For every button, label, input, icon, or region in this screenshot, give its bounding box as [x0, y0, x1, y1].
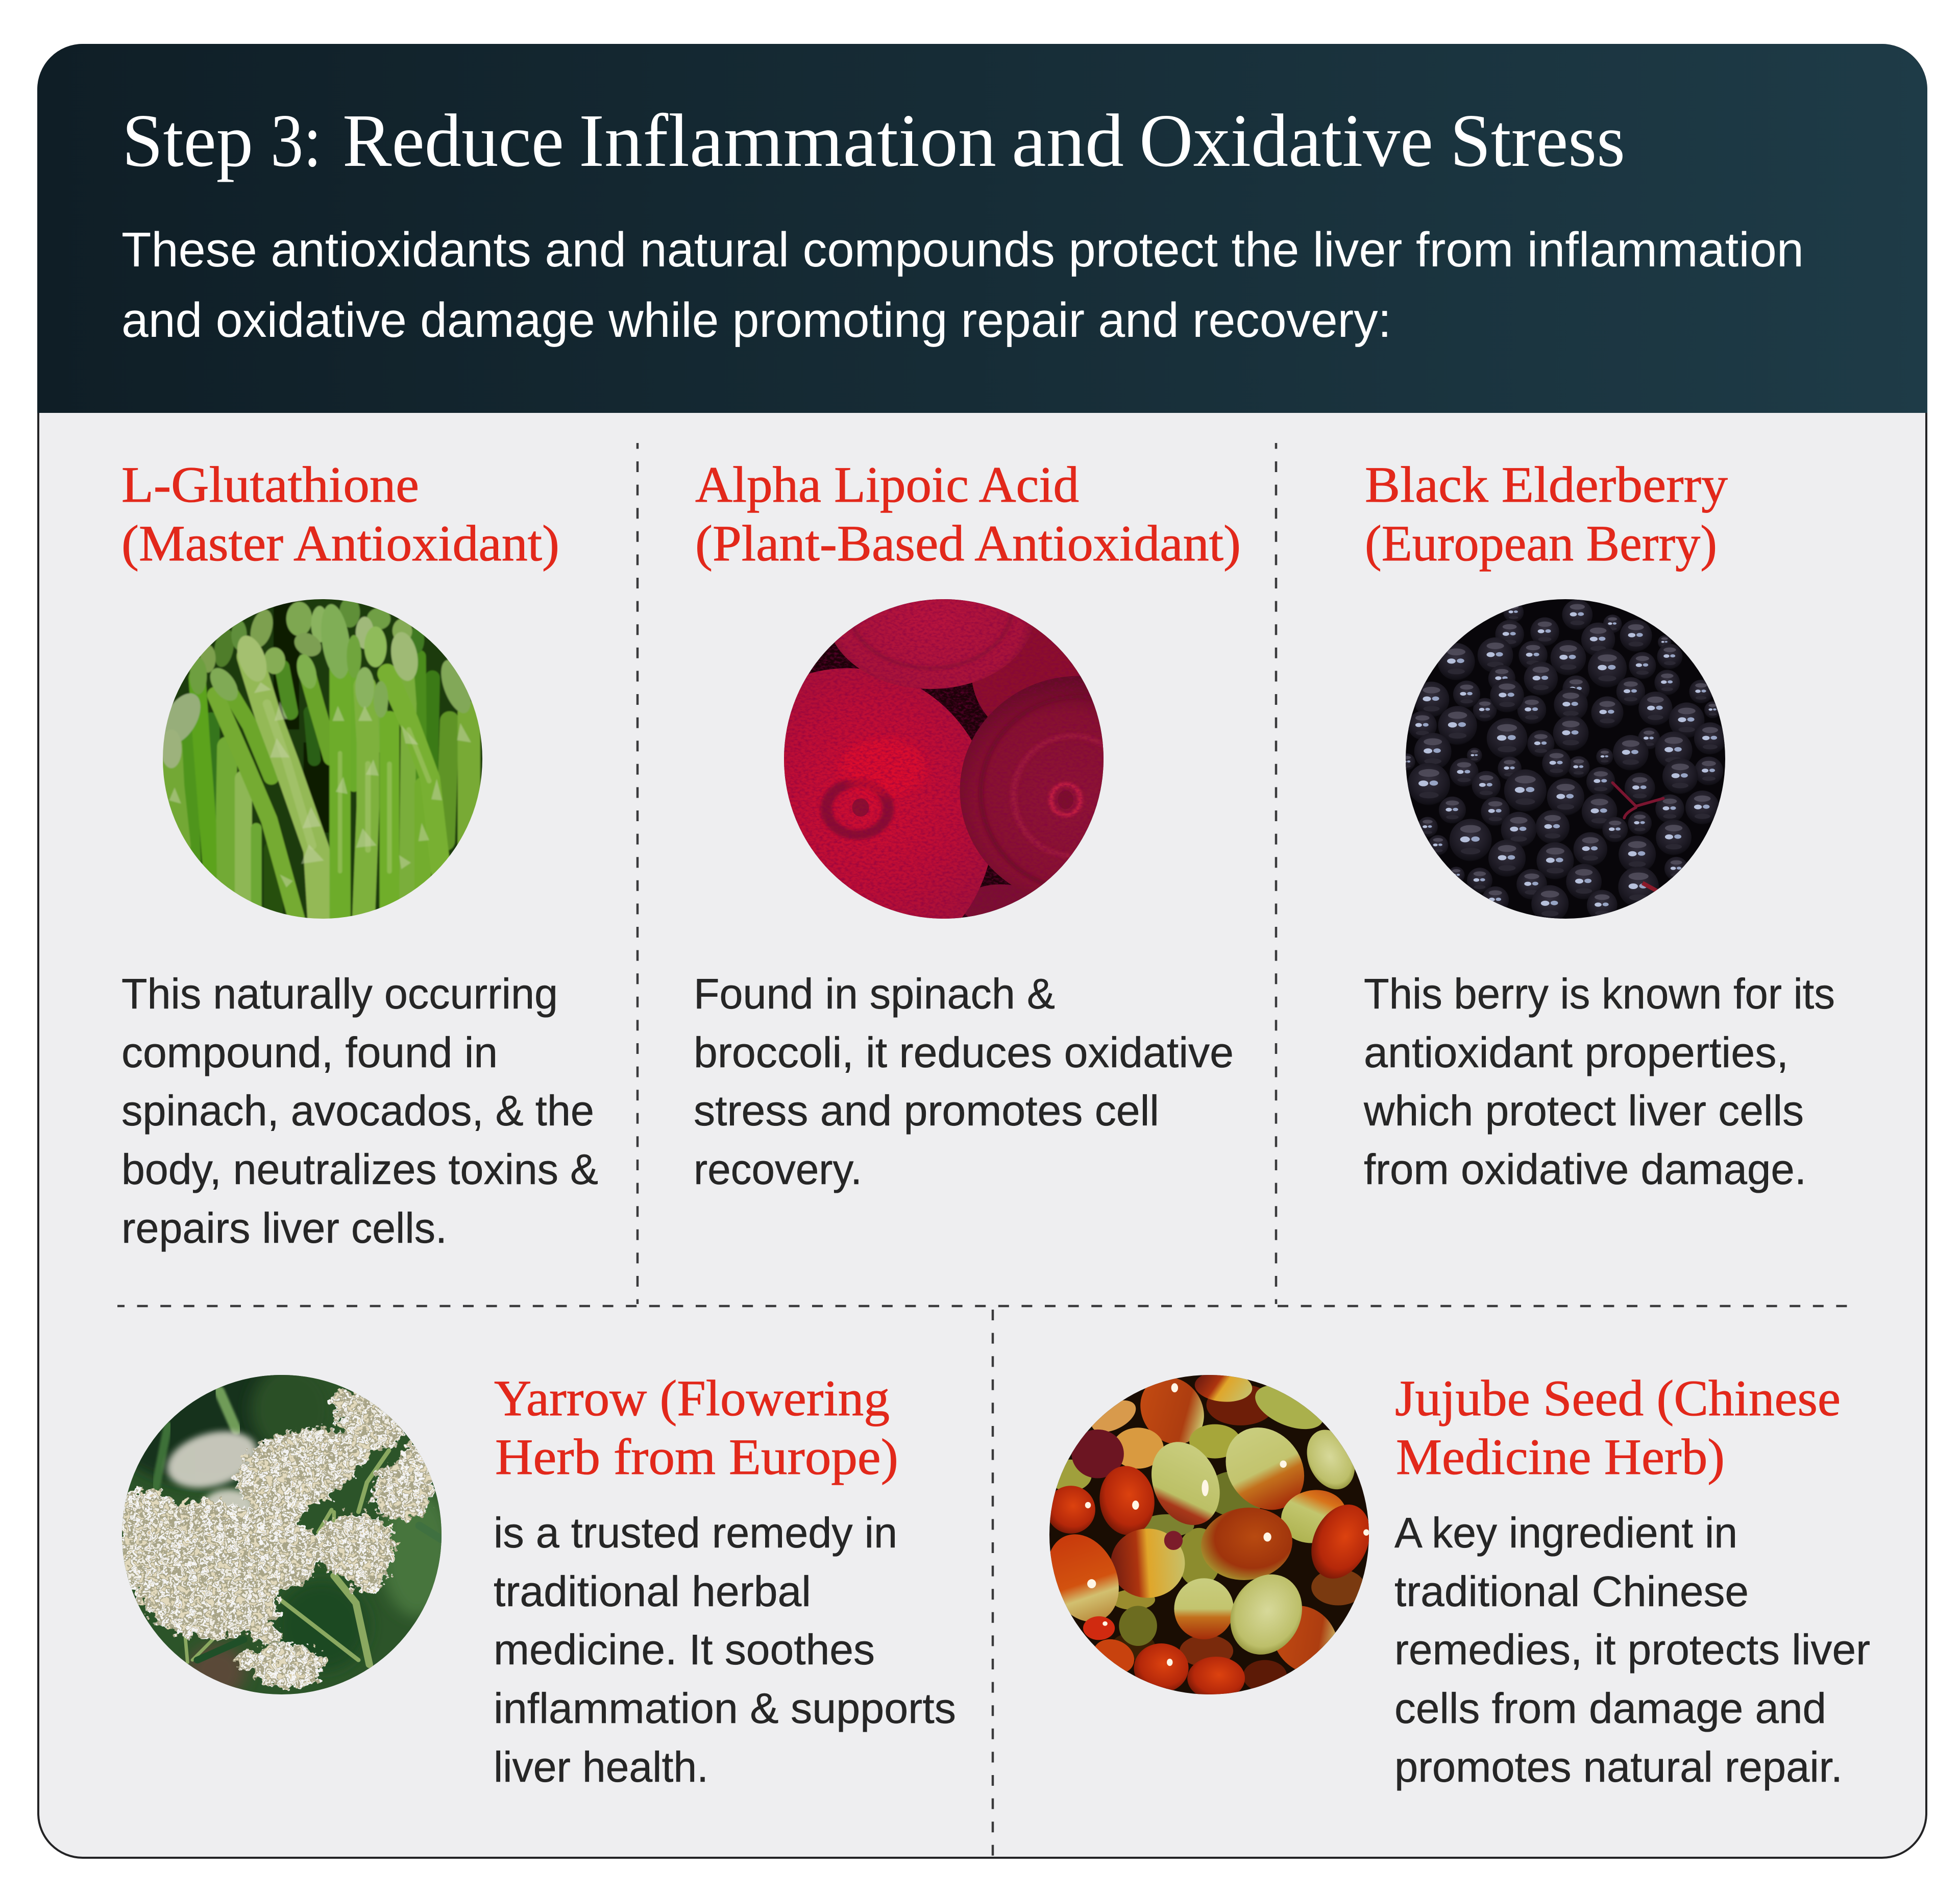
image: beet slices — [784, 599, 1104, 919]
panel: Black Elderberry — [1363, 456, 1835, 1193]
title — [122, 99, 1625, 183]
header band — [37, 44, 1927, 413]
body text: Alpha Lipoic Acid: recovery. — [694, 1145, 862, 1193]
body text: Yarrow: traditional herbal — [494, 1567, 811, 1615]
body text: L-Glutathione — [121, 970, 598, 1252]
subtitle: These antioxidants and natural compounds protect the liver from inflammation — [121, 223, 1804, 277]
body text: Yarrow: inflammation & supports — [494, 1684, 956, 1732]
heading: L-Glutathione — [121, 456, 559, 572]
panel: Alpha Lipoic Acid — [694, 456, 1241, 1193]
body text: Yarrow: liver health. — [494, 1743, 708, 1791]
heading: Alpha Lipoic Acid: Alpha Lipoic Acid — [695, 456, 1079, 513]
body text: Black Elderberry: which protect liver cells — [1363, 1087, 1804, 1135]
body text: Black Elderberry — [1363, 970, 1835, 1193]
image: jujube fruits — [1035, 1367, 1380, 1700]
title: Stress — [1450, 99, 1625, 183]
body text: L-Glutathione: repairs liver cells. — [121, 1204, 447, 1252]
subtitle: and oxidative damage while promoting repair and recovery: — [121, 293, 1391, 348]
heading: Yarrow — [494, 1370, 898, 1485]
heading: L-Glutathione: L-Glutathione — [121, 456, 419, 513]
body text: Alpha Lipoic Acid: broccoli, it reduces oxidative — [694, 1028, 1234, 1076]
heading: Jujube Seed: Jujube Seed (Chinese — [1395, 1370, 1841, 1426]
image: asparagus — [163, 599, 482, 919]
panel: L-Glutathione — [121, 456, 598, 1252]
body text: Yarrow — [494, 1509, 956, 1791]
image: elderberries — [1399, 595, 1730, 923]
body text: L-Glutathione: body, neutralizes toxins & — [121, 1145, 598, 1193]
image: yarrow flowers — [122, 1375, 442, 1694]
body text: Black Elderberry: from oxidative damage. — [1364, 1145, 1806, 1193]
heading: Black Elderberry: Black Elderberry — [1365, 456, 1728, 513]
body text: Alpha Lipoic Acid — [694, 970, 1234, 1193]
title: Inflammation — [579, 99, 996, 183]
body text: Jujube Seed: promotes natural repair. — [1394, 1743, 1843, 1791]
body text: Alpha Lipoic Acid: stress and promotes cell — [694, 1087, 1159, 1135]
body text: Black Elderberry: antioxidant properties, — [1364, 1028, 1788, 1076]
subtitle — [121, 223, 1804, 348]
body text: Jujube Seed: remedies, it protects liver — [1394, 1626, 1870, 1673]
heading: L-Glutathione: (Master Antioxidant) — [121, 515, 559, 572]
title: Oxidative — [1139, 99, 1433, 183]
title: and — [1012, 99, 1124, 183]
heading: Yarrow: Herb from Europe) — [495, 1429, 898, 1485]
title: Step — [122, 99, 253, 183]
body text: Alpha Lipoic Acid: Found in spinach & — [694, 970, 1055, 1018]
panel: Yarrow — [105, 1355, 956, 1791]
body text: L-Glutathione: spinach, avocados, & the — [121, 1087, 594, 1135]
title: 3: — [271, 99, 322, 183]
body text: Jujube Seed: traditional Chinese — [1394, 1567, 1749, 1615]
body text: Jujube Seed: A key ingredient in — [1394, 1509, 1737, 1557]
body text: Yarrow: is a trusted remedy in — [494, 1509, 897, 1557]
heading: Jujube Seed — [1395, 1370, 1841, 1485]
dashed dividers — [117, 443, 1849, 1858]
heading: Jujube Seed: Medicine Herb) — [1396, 1429, 1725, 1485]
body text: L-Glutathione: compound, found in — [121, 1028, 498, 1076]
body text: Black Elderberry: This berry is known for its — [1364, 970, 1835, 1018]
body text: Jujube Seed — [1394, 1509, 1870, 1791]
body text: Jujube Seed: cells from damage and — [1394, 1684, 1826, 1732]
heading: Alpha Lipoic Acid — [695, 456, 1241, 572]
heading: Black Elderberry — [1365, 456, 1728, 572]
title: Reduce — [342, 99, 564, 183]
heading: Yarrow: Yarrow (Flowering — [494, 1370, 890, 1426]
heading: Black Elderberry: (European Berry) — [1365, 515, 1717, 572]
body text: Yarrow: medicine. It soothes — [494, 1626, 875, 1673]
panel: Jujube Seed — [1035, 1367, 1870, 1791]
body text: L-Glutathione: This naturally occurring — [121, 970, 558, 1018]
heading: Alpha Lipoic Acid: (Plant-Based Antioxidant) — [695, 515, 1241, 572]
